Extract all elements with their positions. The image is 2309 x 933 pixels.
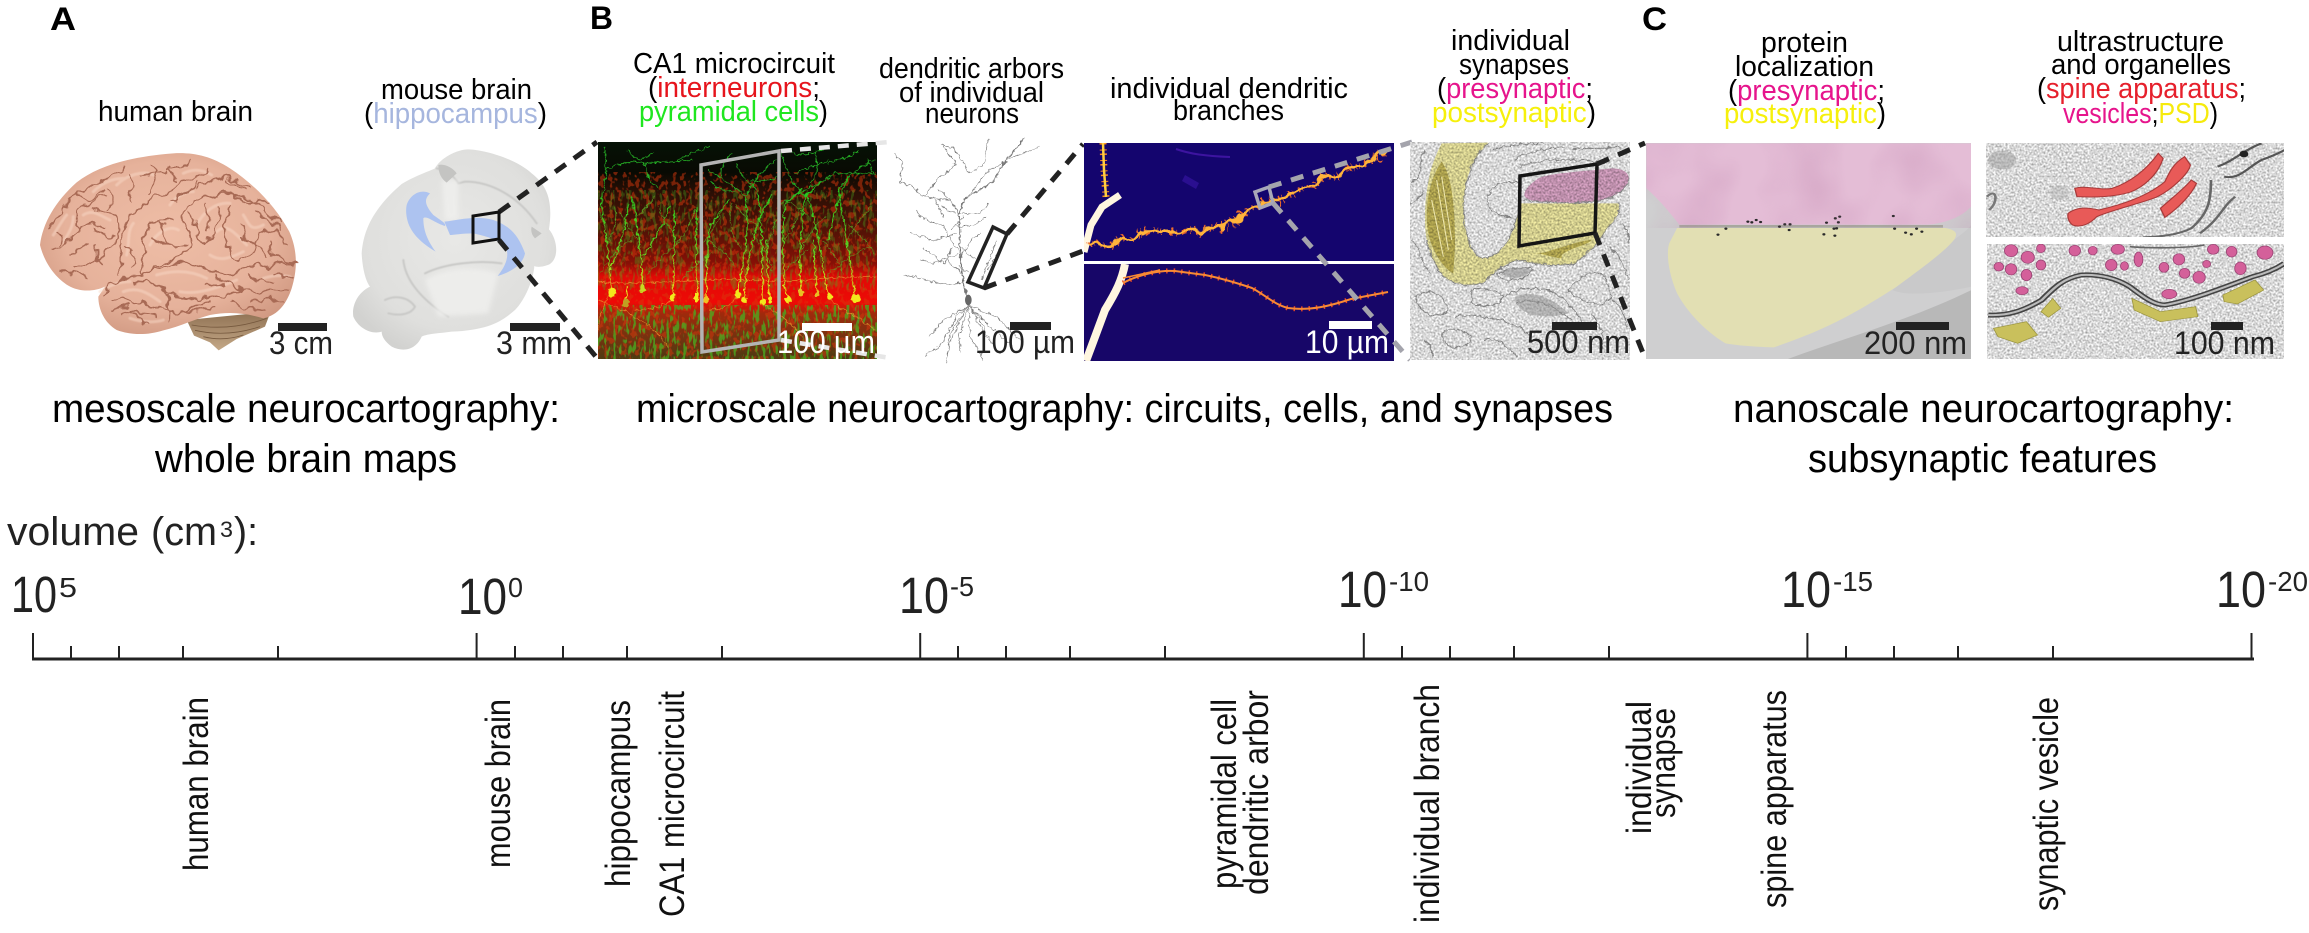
heading: CA1 microcircuit: (interneurons; [648, 72, 820, 104]
heading: CA1 microcircuit: CA1 microcircuit [633, 48, 835, 80]
heading: protein localization: protein [1761, 27, 1848, 59]
axis tick labels [11, 561, 2308, 625]
zoom lines: synapse to protein panel [1595, 143, 1645, 358]
axis label: human brain: human brain [177, 697, 216, 871]
zoom lines: mouse brain to CA1 [499, 142, 597, 358]
red interneuron fibres [598, 172, 877, 359]
heading: protein localization: localization [1735, 51, 1874, 83]
heading: ultrastructure and organelles [2037, 26, 2246, 130]
green basal fibres [598, 305, 877, 359]
mouse region box [473, 212, 499, 243]
cerebellum [187, 312, 271, 350]
axis tick labels: 10 [2216, 561, 2266, 618]
axis label: individual synapse: individual [1620, 701, 1659, 834]
subtitle: mesoscale: mesoscale neurocartography: [52, 387, 560, 431]
presynaptic pink [1646, 143, 1972, 225]
image: mouse brain [353, 149, 556, 350]
heading: dendritic arbors [879, 53, 1064, 130]
postsynaptic membrane [1988, 263, 2284, 315]
apical dendrites [601, 177, 856, 303]
scale bar: 3 cm: 3 cm [269, 325, 333, 361]
axis tick labels: -5 [950, 571, 974, 602]
scale bar: neuron 100 µm: 100 µm [975, 324, 1075, 360]
axis label: individual synapse: synapse [1644, 708, 1683, 818]
image: CA1 microcircuit confocal [598, 142, 877, 359]
PSD [1993, 280, 2264, 343]
subtitle: mesoscale: whole brain maps [154, 437, 457, 481]
scale bar: 3 mm: 3 mm [496, 325, 572, 361]
image: protein localization immunogold EM [1646, 143, 1972, 359]
spine apparatus red cisternae [2068, 153, 2196, 226]
region box on neuron [968, 227, 1007, 288]
heading: individual synapses: synapses [1459, 49, 1569, 81]
heading: human brain: human brain [98, 96, 253, 128]
region box on dendrite [1255, 187, 1273, 208]
oblique side branches [599, 197, 875, 280]
axis label: mouse brain: mouse brain [479, 699, 518, 868]
scale bar: 500 nm: 500 nm [1527, 324, 1630, 360]
axis tick labels: -15 [1833, 566, 1873, 597]
heading: individual synapses: postsynaptic) [1432, 97, 1596, 129]
heading: CA1 microcircuit: pyramidal cells) [639, 96, 828, 128]
red horizontal fibres [598, 276, 877, 347]
thick primary dendrite [1084, 195, 1120, 252]
panel letter B: B [590, 0, 613, 36]
heading: dendritic arbors: of individual [899, 77, 1044, 109]
synaptic cleft [1679, 225, 1943, 228]
lower right shade [1787, 290, 1972, 359]
postsynaptic dendrite yellow [1425, 143, 1619, 285]
axis tick labels: 10 [1781, 561, 1831, 618]
heading: individual synapses [1432, 25, 1596, 129]
heading: mouse brain [364, 74, 547, 130]
heading: individual synapses: individual [1451, 25, 1570, 57]
membranes [1410, 143, 1629, 358]
zoom lines: CA1 to neuron [781, 142, 890, 358]
heading: ultrastructure and organelles: (spine apparatus; [2037, 73, 2246, 105]
axis label: pyramidal cell dendritic arbor: pyramidal cell [1205, 699, 1244, 889]
axis label: hippocampus: hippocampus [599, 700, 638, 887]
hippocampus [406, 192, 525, 276]
region box on synapse [1519, 164, 1597, 246]
heading: ultrastructure and organelles: ultrastructure [2057, 26, 2224, 58]
postsynaptic yellow [1668, 228, 1956, 347]
heading: ultrastructure and organelles: and organelles [2051, 49, 2231, 81]
axis title: volume: volume [7, 510, 139, 554]
heading: individual synapses: (presynaptic; [1437, 73, 1593, 105]
heading: dendritic arbors: neurons [925, 98, 1019, 130]
branch spines and core [1086, 152, 1388, 245]
heading: dendritic arbors: dendritic arbors [879, 53, 1064, 85]
scale bar: 100 nm: 100 nm [2174, 325, 2275, 361]
axis label: synaptic vesicle: synaptic vesicle [2027, 697, 2066, 911]
subtitle: nanoscale: nanoscale neurocartography: [1733, 387, 2234, 431]
image: vesicles and PSD EM [1987, 244, 2284, 359]
heading: individual dendritic branches [1110, 73, 1348, 127]
mitochondrion [1427, 162, 1455, 273]
axis tick labels: 10 [1338, 561, 1387, 618]
presynaptic bouton pink [1524, 168, 1629, 203]
subtitle: nanoscale: subsynaptic features [1808, 437, 2157, 481]
somata [608, 284, 860, 308]
axis tick labels: 5 [59, 572, 77, 603]
axis label: pyramidal cell dendritic arbor: dendritic arbor [1237, 690, 1276, 895]
region box on CA1 [701, 151, 779, 352]
heading: individual dendritic branches: individual dendritic [1110, 73, 1348, 105]
scale axis with ticks [32, 633, 2254, 660]
axis title: volume: (cm [151, 510, 217, 554]
subtitle: nanoscale [1733, 387, 2234, 481]
axis label: individual branch: individual branch [1408, 684, 1447, 923]
axis label: CA1 microcircuit: CA1 microcircuit [653, 691, 692, 917]
axis tick labels: 10 [11, 566, 57, 623]
axis title: volume: 3 [220, 517, 233, 542]
top tuft branches [602, 147, 877, 203]
image: synapse electron micrograph [1410, 142, 1630, 360]
green apical fibres [598, 190, 877, 290]
gyri highlights [53, 170, 290, 322]
zoom lines: dendrite to synapse [1269, 142, 1412, 360]
axis label: pyramidal cell dendritic arbor [1205, 690, 1276, 895]
axis tick labels: -10 [1389, 566, 1429, 597]
axis tick labels: 10 [458, 568, 507, 625]
heading: protein localization: (presynaptic; [1728, 75, 1885, 107]
axis title: volume: ): [234, 510, 258, 554]
axis tick labels: 10 [899, 567, 949, 624]
axis tick labels: 0 [508, 572, 523, 603]
subtitle: mesoscale [52, 387, 560, 481]
axis label: individual synapse [1620, 701, 1683, 834]
axis tick labels: -20 [2268, 566, 2308, 597]
cerebrum silhouette [40, 153, 296, 334]
image: human brain [40, 153, 296, 350]
axis title: volume [7, 510, 258, 554]
sulci shadows [47, 162, 295, 325]
heading: protein localization: postsynaptic) [1724, 98, 1886, 130]
image: neuron dendritic arbor tracing [893, 138, 1040, 363]
image: spine apparatus EM [1986, 143, 2284, 237]
panel letter A: A [50, 1, 76, 37]
panel letter C: C [1642, 1, 1667, 37]
soma [965, 295, 972, 305]
heading: ultrastructure and organelles: vesicles;PSD) [2063, 98, 2218, 130]
synaptic vesicles [1994, 244, 2273, 299]
heading: CA1 microcircuit [633, 48, 835, 128]
axis label: spine apparatus: spine apparatus [1755, 690, 1794, 908]
scale bar: 200 nm: 200 nm [1864, 325, 1967, 361]
heading: protein localization [1724, 27, 1886, 130]
scale bar: dendrite 10 µm: 10 µm [1305, 324, 1389, 360]
gold particles [1716, 215, 1923, 237]
heading: mouse brain: (hippocampus) [364, 98, 547, 130]
heading: mouse brain: mouse brain [381, 74, 532, 106]
image: dendritic branch bottom [1084, 264, 1394, 361]
subtitle: microscale: microscale neurocartography: circuits, cells, and synapses [636, 387, 1613, 431]
heading: individual dendritic branches: branches [1173, 95, 1284, 127]
zoom lines: neuron to dendrite [984, 144, 1083, 288]
image: dendritic branch top [1084, 143, 1394, 261]
scale bar: CA1 100 µm: 100 µm [777, 324, 875, 360]
